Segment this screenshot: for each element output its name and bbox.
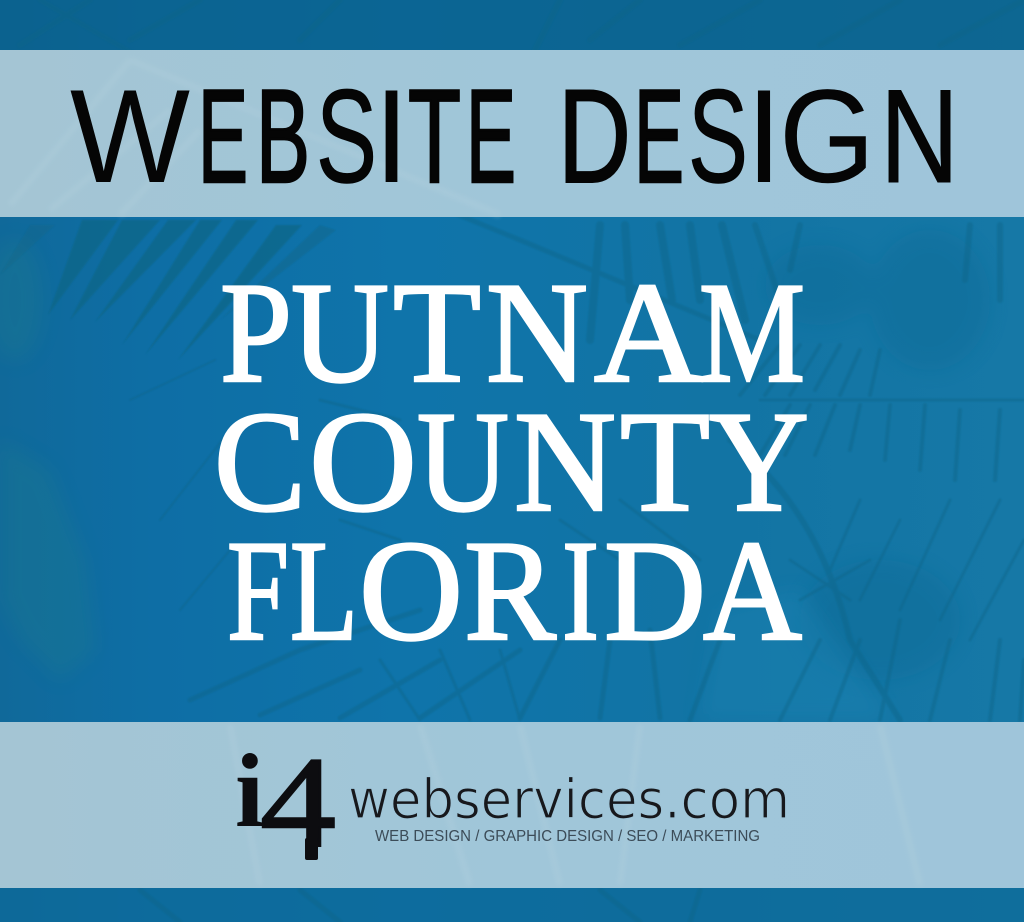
title line: Putnam: P bbox=[220, 254, 292, 413]
bottom band bbox=[0, 722, 1024, 888]
title line: Florida: A bbox=[703, 512, 802, 671]
heading: Website Design: I bbox=[746, 63, 782, 211]
band texture: pale palm fronds bbox=[10, 60, 920, 885]
palm leaves: upper left bbox=[0, 220, 336, 360]
logo mark: i4 bbox=[235, 731, 336, 875]
title line: County: U bbox=[417, 383, 509, 542]
heading: Website Design: E bbox=[634, 63, 684, 211]
logo mark: i4: i bbox=[235, 732, 264, 849]
title line: Putnam: M bbox=[699, 254, 805, 413]
heading: Website Design: S bbox=[316, 63, 377, 211]
heading: Website Design: E bbox=[198, 63, 248, 211]
title line: Putnam: U bbox=[291, 254, 389, 413]
title line: Florida: F bbox=[227, 512, 289, 671]
heading: Website Design: B bbox=[256, 63, 310, 211]
logo tagline: WEB DESIGN / GRAPHIC DESIGN / SEO / MARKETING bbox=[375, 828, 760, 845]
heading: Website Design: T bbox=[408, 63, 461, 211]
location title bbox=[214, 254, 809, 671]
title line: County: Y bbox=[709, 383, 809, 542]
title line: County: O bbox=[309, 383, 417, 542]
logo mark: i4: 4 bbox=[260, 731, 336, 875]
title line: County: N bbox=[514, 383, 616, 542]
heading: Website Design: E bbox=[466, 63, 516, 211]
heading: Website Design: W bbox=[70, 63, 190, 211]
title line: Putnam: A bbox=[594, 254, 703, 413]
title line: Florida: L bbox=[290, 512, 358, 671]
title line: County: T bbox=[620, 383, 710, 542]
title line: Florida: D bbox=[604, 512, 706, 671]
title line: County: C bbox=[214, 383, 306, 542]
title line: Florida: R bbox=[464, 512, 556, 671]
title line: Florida: O bbox=[359, 512, 463, 671]
heading: Website Design: I bbox=[374, 63, 409, 211]
logo: i4 webservices.com bbox=[235, 731, 790, 875]
heading: Website Design: N bbox=[880, 63, 959, 211]
title line: Putnam: N bbox=[486, 254, 588, 413]
top band bbox=[0, 50, 1024, 217]
heading: Website Design: D bbox=[558, 63, 631, 211]
title line: Putnam: T bbox=[393, 254, 481, 413]
heading: Website Design: G bbox=[779, 63, 875, 211]
heading: Website Design: S bbox=[688, 63, 748, 211]
title line: Florida: I bbox=[562, 512, 599, 671]
logo wordmark: webservices.com bbox=[348, 768, 790, 831]
